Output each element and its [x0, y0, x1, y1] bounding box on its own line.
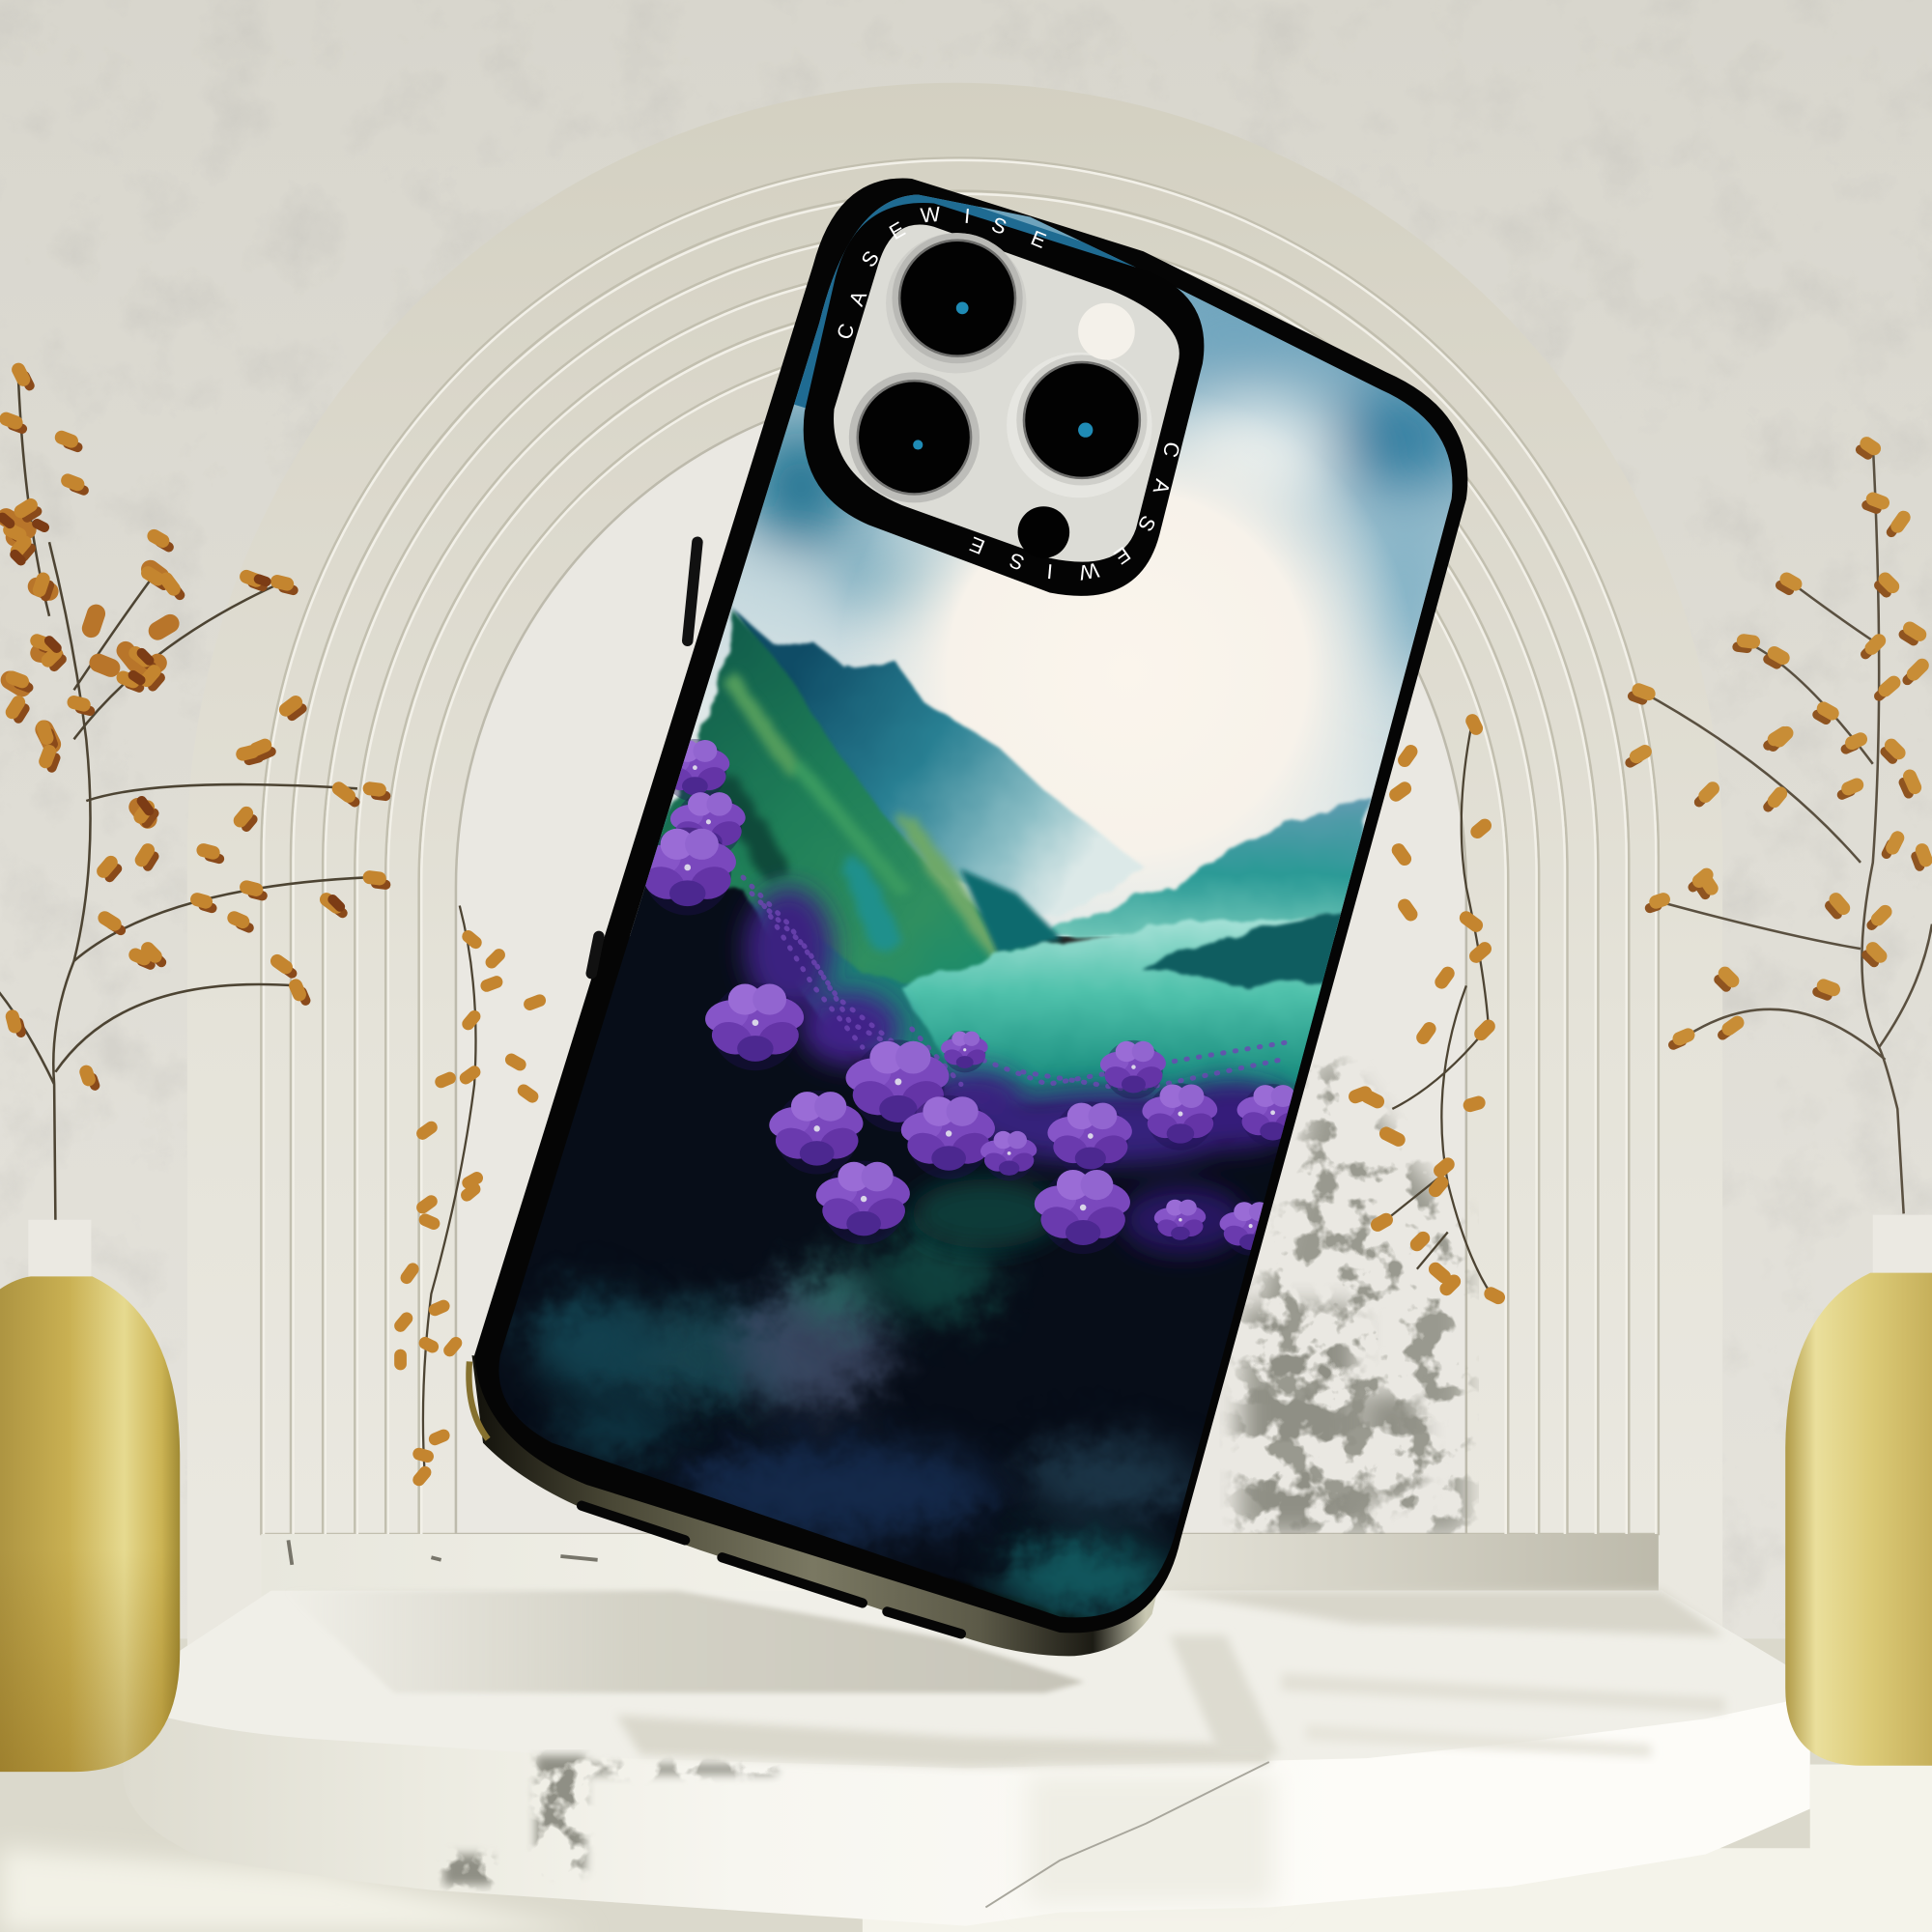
brand text ring: E — [885, 216, 909, 244]
podium marble cracks — [431, 1749, 788, 1891]
marble veining in niche — [1220, 1035, 1479, 1540]
brand text ring: C — [1158, 440, 1185, 460]
shadow bars — [616, 1716, 1269, 1767]
sky — [630, 195, 1453, 937]
lens top — [886, 233, 1026, 373]
sun glow — [858, 402, 1406, 945]
brand text ring: W — [1077, 558, 1101, 585]
phone gold edge highlight — [469, 1361, 488, 1439]
camera window — [834, 225, 1179, 562]
painting on the back — [469, 173, 1491, 1638]
phone side edge — [472, 1355, 1182, 1656]
brand text ring — [832, 202, 1185, 585]
brand text ring: A — [844, 287, 871, 309]
podium top surface — [124, 1591, 1810, 1768]
brand text ring: S — [856, 246, 884, 271]
camera island — [804, 203, 1204, 596]
purple heather — [744, 887, 1300, 1254]
left vase — [0, 1220, 180, 1772]
microphone hole — [1018, 506, 1069, 558]
brand text ring: E — [1110, 542, 1135, 570]
plinth back — [261, 1534, 1659, 1596]
blue strip around camera ring — [801, 203, 1146, 407]
right plant — [1631, 443, 1932, 1213]
middle-left vine — [401, 906, 540, 1480]
brand text ring: C — [832, 321, 859, 342]
left plant — [0, 370, 385, 1220]
phone — [469, 173, 1491, 1656]
podium body — [124, 1591, 1810, 1926]
lens bottom-left — [849, 372, 980, 502]
right dark hill — [1140, 912, 1350, 985]
heather speckles — [743, 877, 1293, 1091]
floor — [0, 1638, 1932, 1932]
clouds — [733, 296, 1466, 678]
green slope — [648, 609, 989, 983]
brand text ring: E — [966, 532, 988, 559]
phone shadow on podium — [283, 1591, 1084, 1693]
bright slope streaks — [727, 678, 996, 949]
side buttons — [591, 542, 697, 974]
valley — [899, 918, 1343, 1084]
brand text ring: I — [1046, 559, 1054, 583]
brand text ring: S — [1133, 512, 1161, 536]
port slots — [582, 1506, 961, 1634]
arch niche — [187, 83, 1722, 1658]
brand text ring: I — [963, 204, 971, 228]
teal underpainting — [655, 800, 1321, 1107]
flash — [1078, 303, 1135, 359]
brand text ring: E — [1028, 225, 1050, 253]
right ridge — [1035, 795, 1370, 936]
dark teal knoll — [960, 868, 1062, 955]
right vase — [1785, 1215, 1932, 1766]
brand text ring: W — [920, 202, 942, 227]
dark foreground — [469, 881, 1319, 1638]
distant blue mountains — [734, 610, 1146, 918]
middle-right vine — [1355, 721, 1498, 1297]
foreground mist — [529, 1233, 1195, 1614]
lens right — [1007, 353, 1152, 497]
purple flowers — [634, 739, 1311, 1256]
brand text ring: A — [1149, 477, 1176, 497]
brand text ring: S — [1006, 548, 1027, 576]
brand text ring: S — [988, 212, 1009, 240]
phone case body — [474, 179, 1467, 1633]
podium — [124, 1591, 1810, 1926]
